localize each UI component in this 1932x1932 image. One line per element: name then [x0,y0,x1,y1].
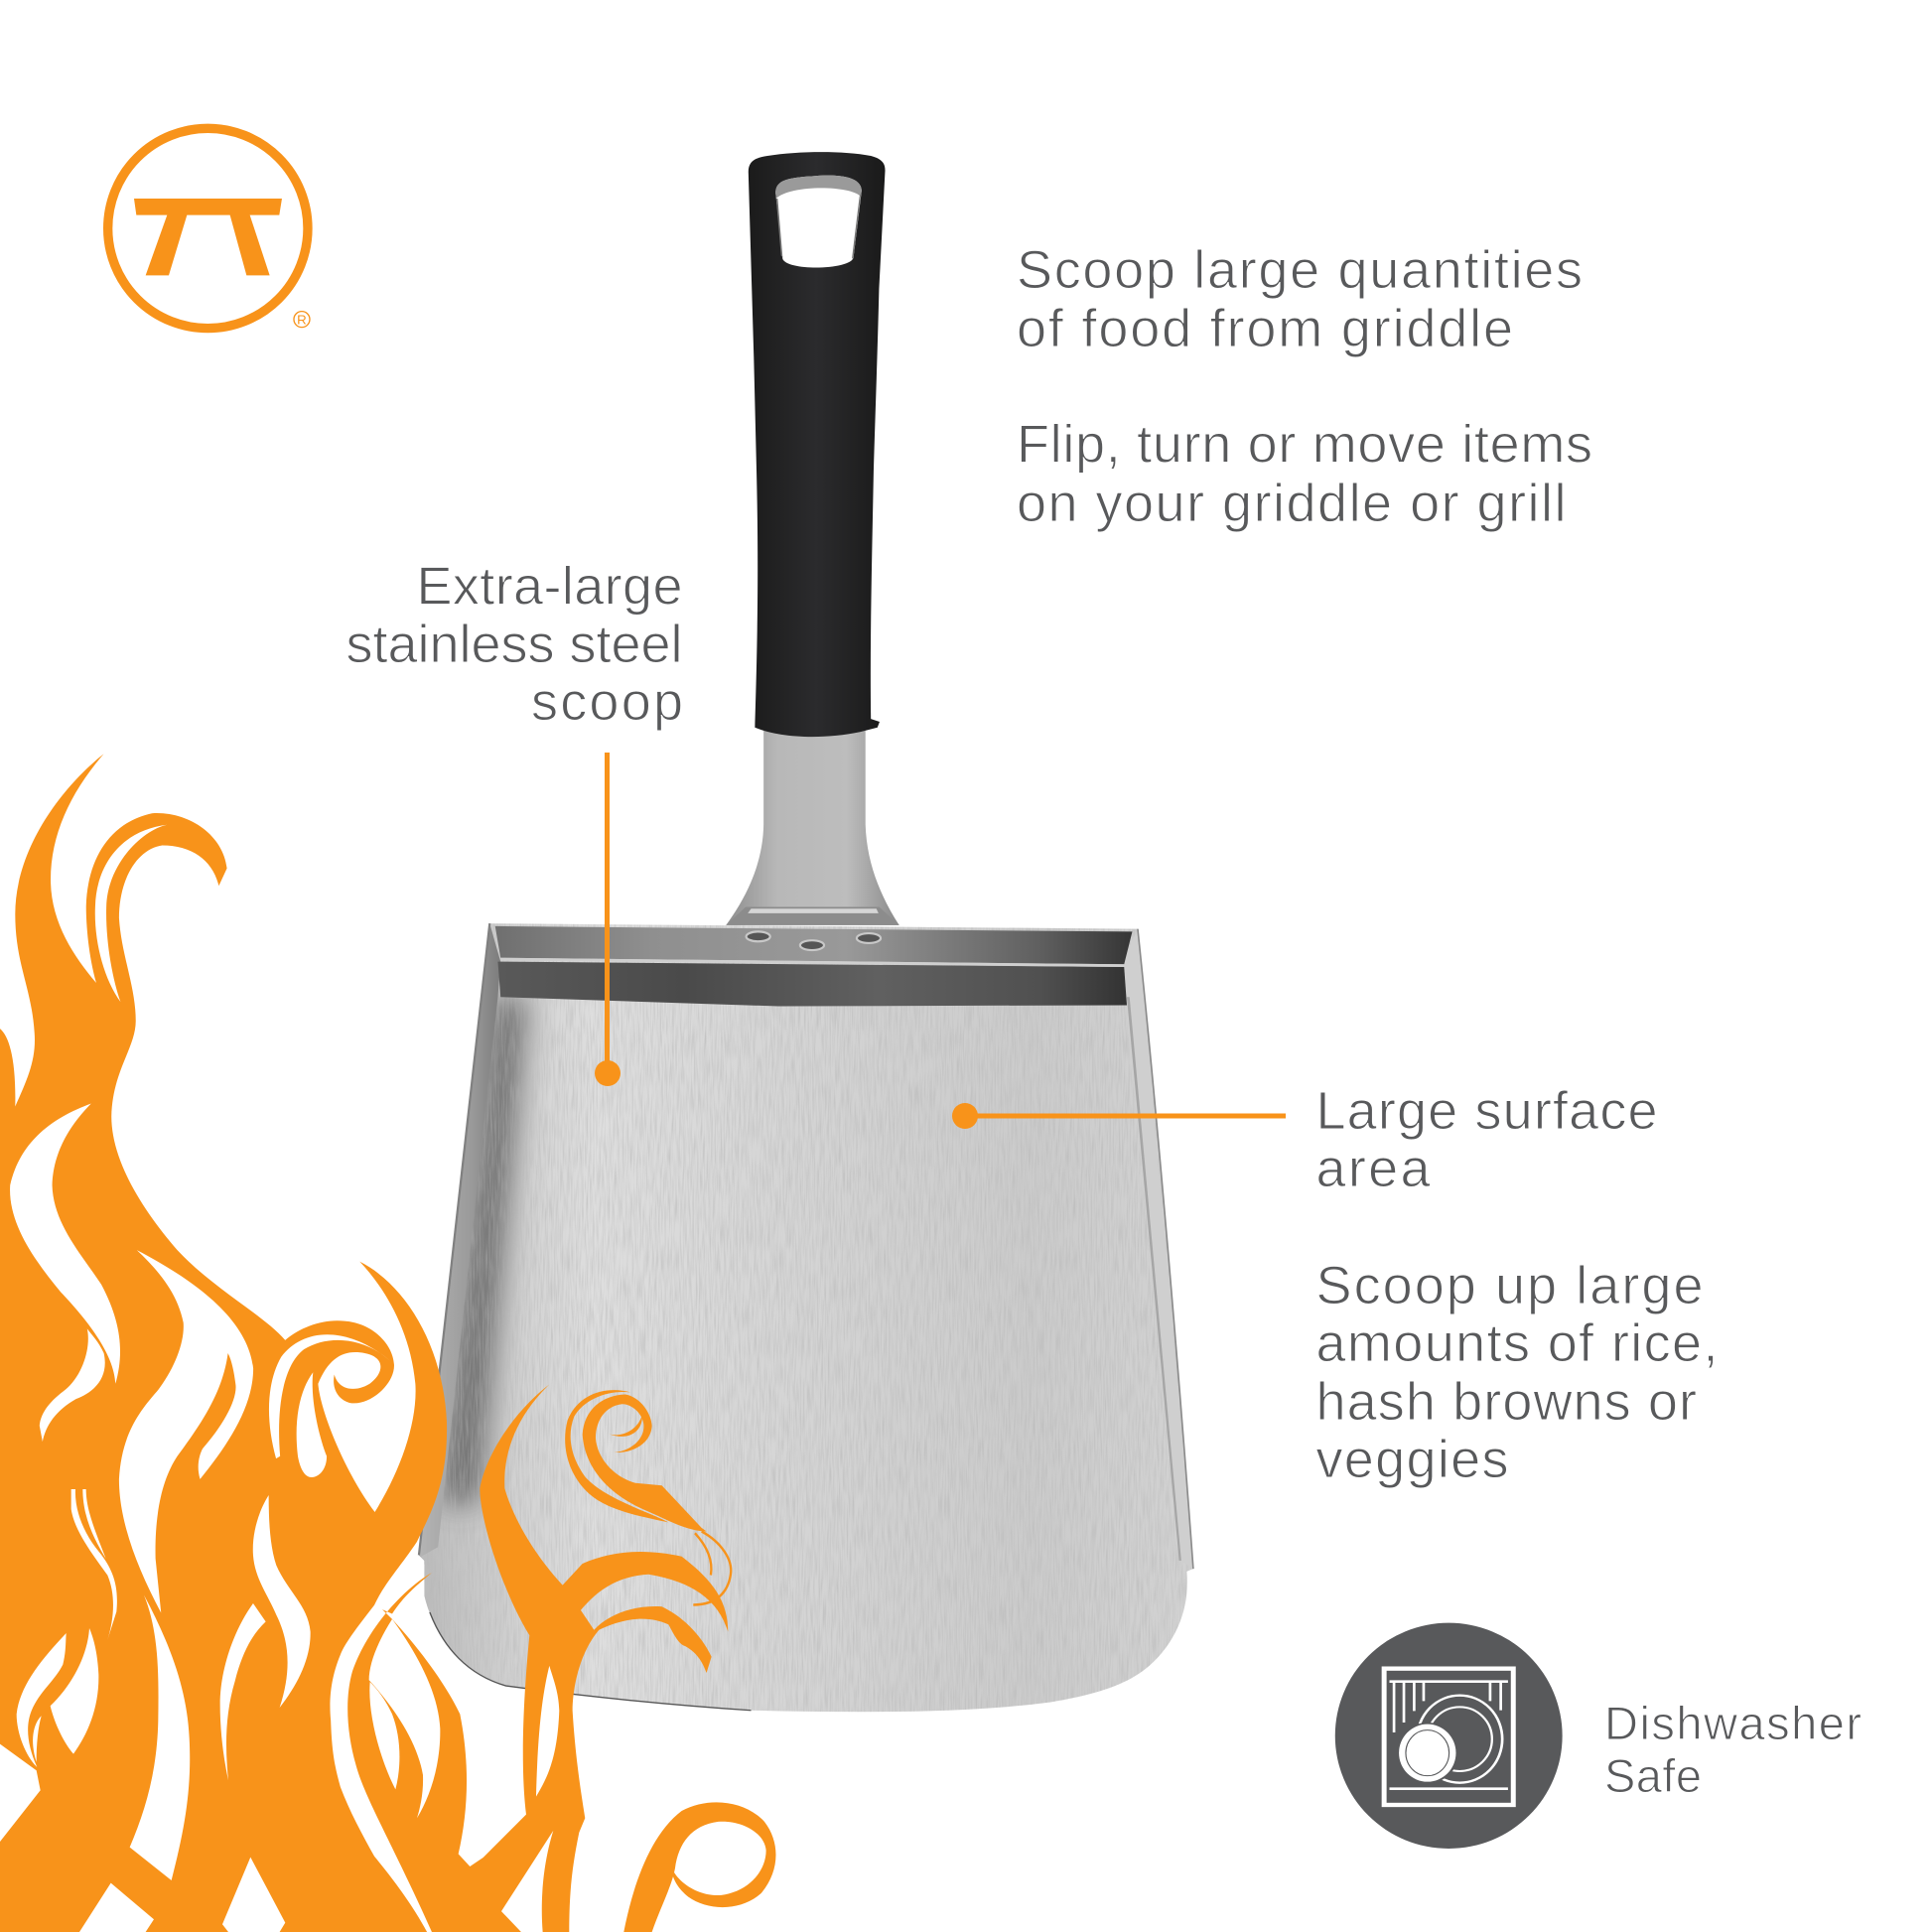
text: top feature notes: on your griddle or grill [1017,474,1567,533]
text: surface area notes [1316,1081,1718,1489]
text: top feature notes [1017,240,1592,533]
black handle with hanging hole [749,152,886,737]
callout line: scoop material [595,753,621,1086]
text: top feature notes: of food from griddle [1017,299,1513,358]
product: griddle scoop [397,152,1251,1747]
icon: dishwasher [1335,1623,1563,1849]
text: top feature notes: Flip, turn or move items [1017,415,1592,475]
text: surface area notes: Scoop up large [1316,1256,1704,1315]
text: scoop label: Extra-large [417,556,683,616]
text: surface area notes: amounts of rice, [1316,1313,1718,1373]
scoop blade [417,923,1194,1712]
right flames and swirls [347,1384,775,1932]
rivets on back lip [747,931,881,950]
text: surface area notes: Large surface [1316,1081,1658,1141]
scoop neck [726,728,899,925]
logo: orange table mark in circle [108,128,310,329]
text: top feature notes: Scoop large quantities [1017,240,1583,300]
text: scoop label: stainless steel [345,615,683,674]
text: surface area notes: veggies [1316,1430,1509,1489]
text: surface area notes: area [1316,1139,1431,1198]
logo: orange table mark in circle: R [297,313,307,328]
main flame mass [0,754,447,1932]
text: scoop label [345,556,683,732]
text: dishwasher safe [1604,1697,1862,1802]
text: surface area notes: hash browns or [1316,1372,1697,1432]
lower flame cut-outs [0,1489,311,1932]
flame graphic [0,754,775,1932]
text: scoop label: scoop [531,672,683,732]
text: dishwasher safe: Safe [1604,1749,1702,1802]
callout line: surface area [952,1103,1286,1129]
text: dishwasher safe: Dishwasher [1604,1697,1862,1749]
